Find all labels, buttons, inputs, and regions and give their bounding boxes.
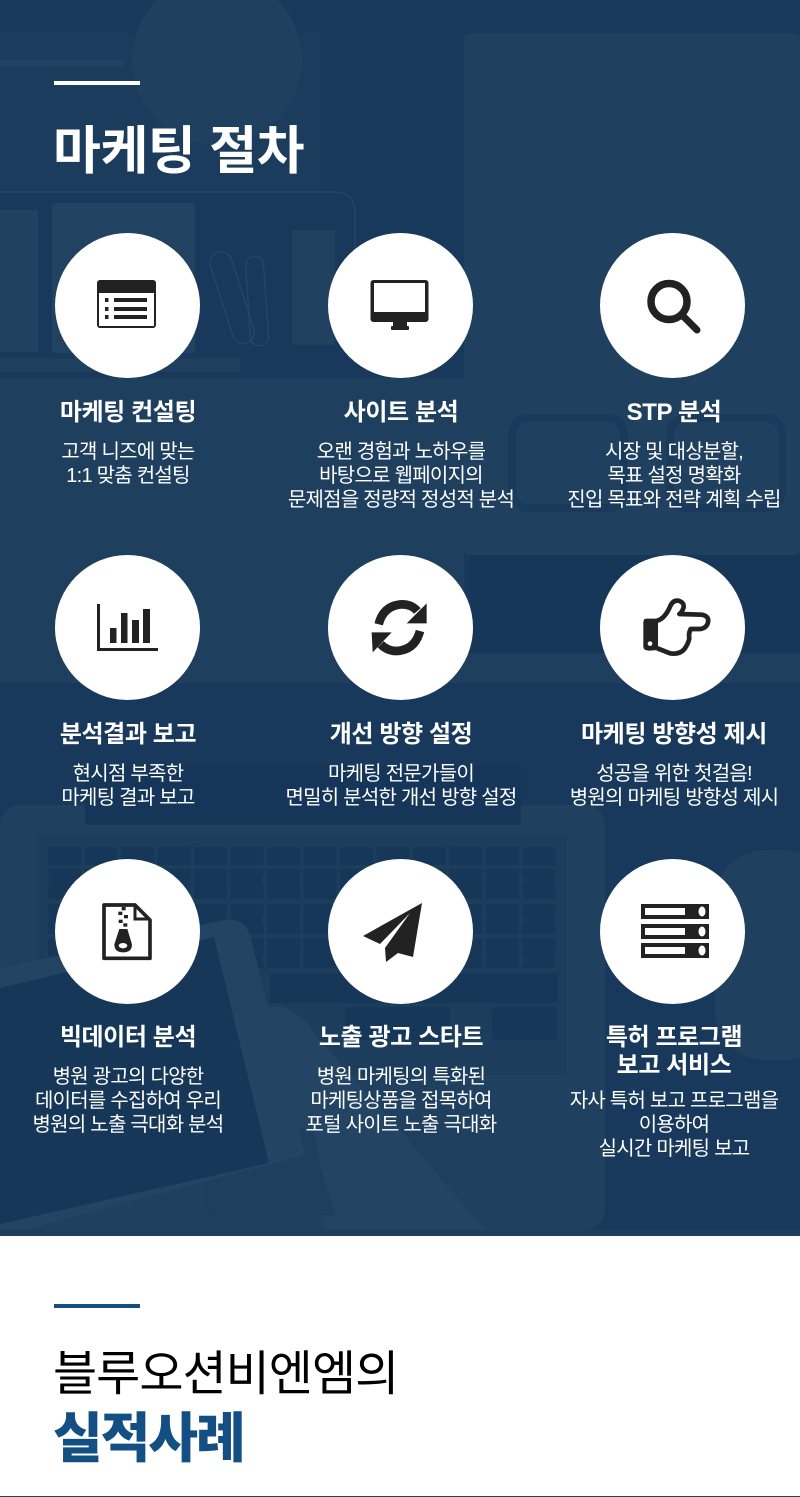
description: 이용하여 — [639, 1114, 709, 1136]
heading: 개선 방향 설정 — [330, 721, 472, 748]
description — [33, 1066, 223, 1136]
description: 자사 특허 보고 프로그램을 — [570, 1090, 778, 1112]
description — [61, 441, 195, 487]
description: 목표 설정 명확화 — [607, 465, 741, 487]
laptop body — [0, 805, 605, 1230]
icon: list window — [55, 233, 200, 378]
heading: 분석결과 보고 — [60, 721, 196, 748]
description: 바탕으로 웹페이지의 — [319, 465, 483, 487]
card: 빅데이터 분석 — [33, 859, 223, 1136]
bottom line — [0, 1496, 800, 1497]
heading: 특허 프로그램 — [606, 1024, 742, 1051]
description: 면밀히 분석한 개선 방향 설정 — [285, 787, 517, 809]
description — [570, 763, 778, 809]
card: 개선 방향 설정 — [285, 555, 517, 809]
description: 고객 니즈에 맞는 — [61, 441, 195, 463]
icon: magnifier — [600, 233, 745, 378]
title: 마케팅 절차 — [53, 123, 304, 181]
description: 시장 및 대상분할, — [605, 441, 743, 463]
heading: 사이트 분석 — [344, 399, 458, 426]
card: 사이트 분석 — [288, 233, 514, 511]
description: 성공을 위한 첫걸음! — [596, 763, 752, 785]
heading: 마케팅 방향성 제시 — [581, 721, 767, 748]
section rule — [54, 1304, 140, 1308]
tablet — [0, 920, 305, 1236]
description — [570, 1090, 778, 1160]
heading: 빅데이터 분석 — [60, 1024, 196, 1051]
description: 병원 광고의 다양한 — [53, 1066, 203, 1088]
description: 병원의 노출 극대화 분석 — [33, 1114, 223, 1136]
description — [61, 763, 195, 809]
heading: 노출 광고 스타트 — [319, 1024, 483, 1051]
description: 1:1 맞춤 컨설팅 — [66, 465, 190, 487]
description: 병원 마케팅의 특화된 — [317, 1066, 485, 1088]
description: 데이터를 수집하여 우리 — [35, 1090, 221, 1112]
hand — [240, 1006, 490, 1236]
description — [306, 1066, 496, 1136]
icon: monitor — [328, 233, 473, 378]
heading: STP 분석 — [627, 399, 721, 426]
title rule — [54, 81, 140, 85]
section heading accent: 실적사례 — [53, 1409, 244, 1469]
icon: bar chart — [55, 555, 200, 700]
trackpad — [206, 1130, 446, 1215]
mouse — [715, 850, 800, 1060]
heading: 보고 서비스 — [617, 1052, 731, 1079]
icon: pointing hand — [600, 555, 745, 700]
card: 마케팅 방향성 제시 — [570, 555, 778, 809]
description: 진입 목표와 전략 계획 수립 — [567, 489, 781, 511]
description — [288, 441, 514, 511]
card: 노출 광고 스타트 — [306, 859, 496, 1136]
heading: 마케팅 컨설팅 — [60, 399, 196, 426]
icon: refresh arrows — [328, 555, 473, 700]
heading — [606, 1024, 742, 1079]
icon: paper plane — [328, 859, 473, 1004]
section heading: 블루오션비엔엠의 — [53, 1348, 398, 1401]
description: 문제점을 정량적 정성적 분석 — [288, 489, 514, 511]
description: 실시간 마케팅 보고 — [599, 1138, 749, 1160]
card: 마케팅 컨설팅 — [55, 233, 200, 487]
description: 오랜 경험과 노하우를 — [317, 441, 485, 463]
icon: server stack — [600, 859, 745, 1004]
description: 마케팅상품을 접목하여 — [310, 1090, 492, 1112]
description: 현시점 부족한 — [73, 763, 183, 785]
icon: zip file — [55, 859, 200, 1004]
description: 마케팅 결과 보고 — [61, 787, 195, 809]
card: STP 분석 — [567, 233, 781, 511]
description — [567, 441, 781, 511]
description: 마케팅 전문가들이 — [328, 763, 474, 785]
card: 분석결과 보고 — [55, 555, 200, 809]
card: 특허 프로그램 보고 서비스 — [570, 859, 778, 1160]
description: 포털 사이트 노출 극대화 — [306, 1114, 496, 1136]
description — [285, 763, 517, 809]
description: 병원의 마케팅 방향성 제시 — [570, 787, 778, 809]
